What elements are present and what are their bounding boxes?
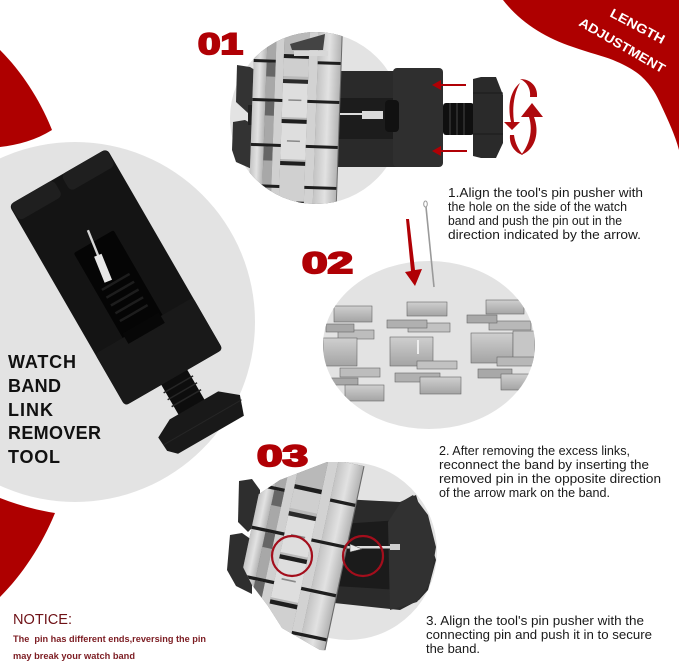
step 3 text [426, 614, 652, 656]
step 1 text [448, 186, 643, 242]
step 2 pin [424, 201, 434, 287]
notice: The pin has different ends,reversing the pin [13, 634, 206, 645]
middle link [387, 302, 461, 394]
tool body [325, 495, 436, 610]
corner label: length adjustment: LENGTH [608, 5, 668, 47]
title: watch band link remover tool [8, 352, 101, 467]
step 2 red arrow [405, 219, 422, 286]
notice [13, 611, 206, 662]
watch band [250, 32, 343, 204]
step 2 heading: 02 [302, 247, 353, 280]
corner label: length adjustment: ADJUSTMENT [576, 15, 668, 76]
title: watch band link remover tool: WATCH [8, 352, 76, 372]
step 2 text: of the arrow mark on the band. [439, 486, 610, 500]
step 1 text: band and push the pin out in the [448, 214, 622, 228]
tool jaws [232, 65, 258, 170]
step 3 heading: 03 [257, 440, 308, 473]
step 2 text [439, 444, 661, 500]
step 3 text: the band. [426, 642, 480, 656]
notice: NOTICE: [13, 611, 72, 628]
right link [467, 300, 535, 390]
large link remover tool photo [9, 148, 257, 465]
push pin [340, 111, 383, 119]
step 3 text: 3. Align the tool's pin pusher with the [426, 614, 644, 628]
watch band [243, 462, 364, 650]
rotation arrows [504, 79, 543, 155]
left link [323, 306, 384, 401]
step 1 text: direction indicated by the arrow. [448, 228, 641, 242]
step 2 grey ellipse [323, 261, 535, 429]
title: watch band link remover tool: BAND [8, 376, 61, 396]
connecting pin [337, 544, 400, 552]
step 3 text: connecting pin and push it in to secure [426, 628, 652, 642]
step 3 tool and band [227, 462, 436, 650]
step 1 text: the hole on the side of the watch [448, 200, 627, 214]
step 1 heading: 01 [198, 28, 243, 61]
step 1 tool and band [232, 32, 503, 204]
title: watch band link remover tool: TOOL [8, 447, 60, 467]
title: watch band link remover tool: LINK [8, 400, 53, 420]
tool body [335, 68, 443, 167]
red shape: upper left [0, 50, 52, 147]
step 2 text: reconnect the band by inserting the [439, 458, 649, 472]
step 2 text: 2. After removing the excess links, [439, 444, 630, 458]
step 1 grey circle [230, 32, 402, 204]
notice: may break your watch band [13, 651, 135, 662]
large grey circle [0, 142, 255, 502]
screw and nut [443, 77, 503, 158]
red corner: top right [503, 0, 679, 150]
tool body slot and block [335, 495, 436, 610]
step 3 grey circle [259, 462, 437, 640]
red shape: lower left [0, 498, 55, 597]
red arrows [432, 80, 467, 156]
red circles [272, 536, 383, 576]
step 1 text: 1.Align the tool's pin pusher with [448, 186, 643, 200]
step 2 links [323, 300, 535, 401]
tool jaws [227, 479, 260, 594]
title: watch band link remover tool: REMOVER [8, 423, 101, 443]
step 2 text: removed pin in the opposite direction [439, 472, 661, 486]
